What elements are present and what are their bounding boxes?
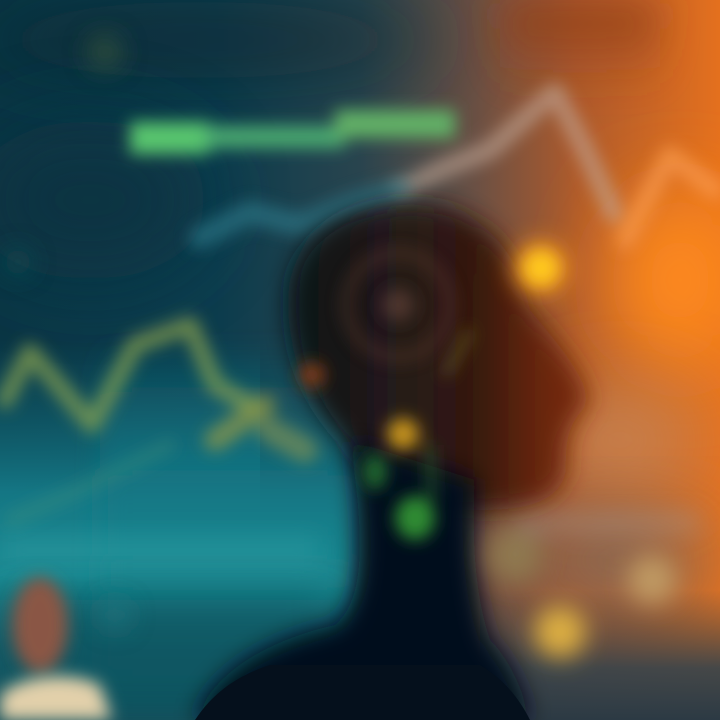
bokeh: faint top-left dots: [10, 34, 124, 624]
chart line: olive-green zigzag on left: [5, 325, 305, 520]
silhouette: head and shoulders: [195, 204, 588, 720]
chart line: grey-white rising line and orange right peak: [200, 92, 715, 240]
heading: green blurred title strip: [130, 110, 455, 154]
icon: glowing yellow light on head: [512, 240, 568, 296]
circuit: green and yellow neck highlights: [299, 330, 470, 540]
bokeh: warm city lights bottom right: [487, 515, 700, 658]
figure: small person bottom left: [0, 577, 112, 720]
